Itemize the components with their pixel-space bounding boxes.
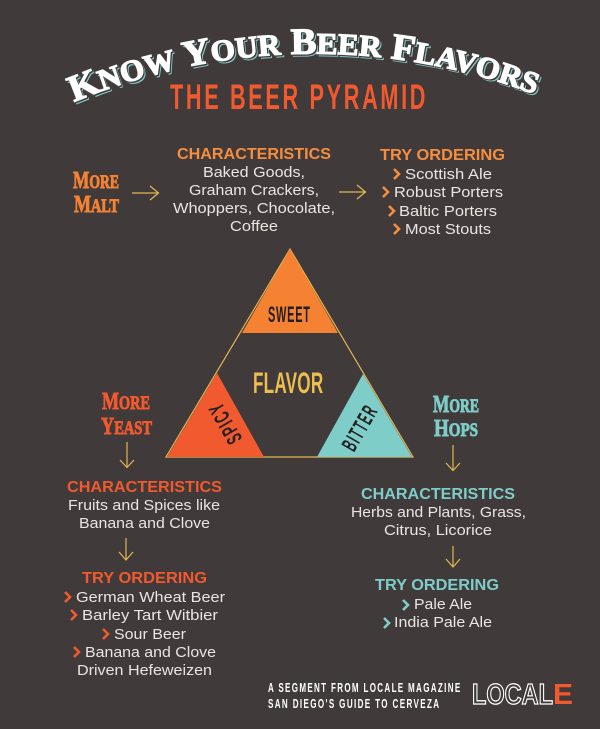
malt characteristics (173, 146, 335, 235)
arrow: yeast to characteristics (120, 442, 134, 468)
malt characteristics: CHARACTERISTICS (177, 146, 331, 163)
label: more hops: HOPS (434, 416, 478, 442)
label: more yeast (101, 389, 152, 440)
arrow: characteristics to ordering (339, 185, 366, 199)
hops characteristics: Citrus, Licorice (384, 522, 492, 539)
hops try ordering (375, 577, 499, 631)
title: KNOW YOUR BEER FLAVORS (67, 32, 541, 104)
panel: malt (73, 146, 505, 238)
yeast try ordering (65, 570, 225, 679)
malt try ordering: Scottish Ale (405, 166, 492, 183)
arrow: characteristics to ordering (446, 546, 460, 567)
malt try ordering: Robust Porters (394, 184, 503, 201)
yeast try ordering: TRY ORDERING (82, 570, 207, 587)
malt characteristics: Coffee (230, 218, 278, 235)
yeast characteristics (67, 479, 222, 532)
malt characteristics: Whoppers, Chocolate, (173, 200, 335, 217)
malt try ordering: Baltic Porters (399, 203, 497, 220)
yeast characteristics: CHARACTERISTICS (67, 479, 222, 496)
footer credit (268, 681, 460, 712)
hops characteristics: CHARACTERISTICS (361, 486, 515, 503)
segment: sweet: SWEET (268, 302, 310, 327)
footer credit: SAN DIEGO'S GUIDE TO CERVEZA (268, 697, 439, 712)
malt try ordering (380, 147, 505, 238)
label: more malt (73, 168, 119, 218)
segment: spicy (167, 373, 264, 457)
label: more malt: MORE (73, 168, 119, 194)
malt try ordering: TRY ORDERING (380, 147, 505, 164)
title: KNOW YOUR BEER FLAVORS (64, 28, 540, 102)
panel: yeast (65, 389, 225, 679)
pyramid (166, 249, 413, 457)
malt characteristics: Graham Crackers, (189, 182, 319, 199)
yeast characteristics: Fruits and Spices like (68, 497, 220, 514)
yeast try ordering: Barley Tart Witbier (82, 607, 218, 624)
arrow: malt to characteristics (132, 186, 158, 200)
malt try ordering: Most Stouts (405, 221, 491, 238)
label: more hops (433, 392, 479, 442)
title: KNOW YOUR BEER FLAVORS (68, 33, 542, 104)
segment: spicy: SPICY (204, 399, 247, 448)
hops try ordering: India Pale Ale (394, 614, 492, 631)
yeast try ordering: Driven Hefeweizen (77, 662, 212, 679)
yeast try ordering: Sour Beer (114, 626, 186, 643)
hops try ordering: Pale Ale (414, 596, 472, 613)
logo: locale: E (553, 679, 573, 711)
segment: bitter: BITTER (336, 401, 383, 455)
yeast try ordering: German Wheat Beer (76, 589, 225, 606)
segment: bitter (317, 374, 412, 457)
subtitle: THE BEER PYRAMID (170, 79, 425, 117)
malt characteristics: Baked Goods, (203, 164, 305, 181)
center label: flavor: FLAVOR (253, 367, 323, 400)
hops characteristics: Herbs and Plants, Grass, (351, 504, 526, 521)
label: more yeast: YEAST (101, 414, 152, 440)
footer credit: A SEGMENT FROM LOCALE MAGAZINE (268, 681, 460, 696)
arrow: hops to characteristics (446, 445, 460, 470)
yeast characteristics: Banana and Clove (79, 515, 210, 532)
segment: sweet (242, 249, 338, 333)
label: more yeast: MORE (102, 389, 150, 415)
label: more hops: MORE (433, 392, 479, 418)
label: more malt: MALT (74, 192, 119, 218)
triangle outline (166, 249, 413, 457)
hops try ordering: TRY ORDERING (375, 577, 499, 594)
panel: hops (351, 392, 526, 631)
logo: locale: LOCAL (472, 679, 553, 711)
arrow: characteristics to ordering (119, 538, 133, 560)
yeast try ordering: Banana and Clove (85, 644, 216, 661)
hops characteristics (351, 486, 526, 539)
